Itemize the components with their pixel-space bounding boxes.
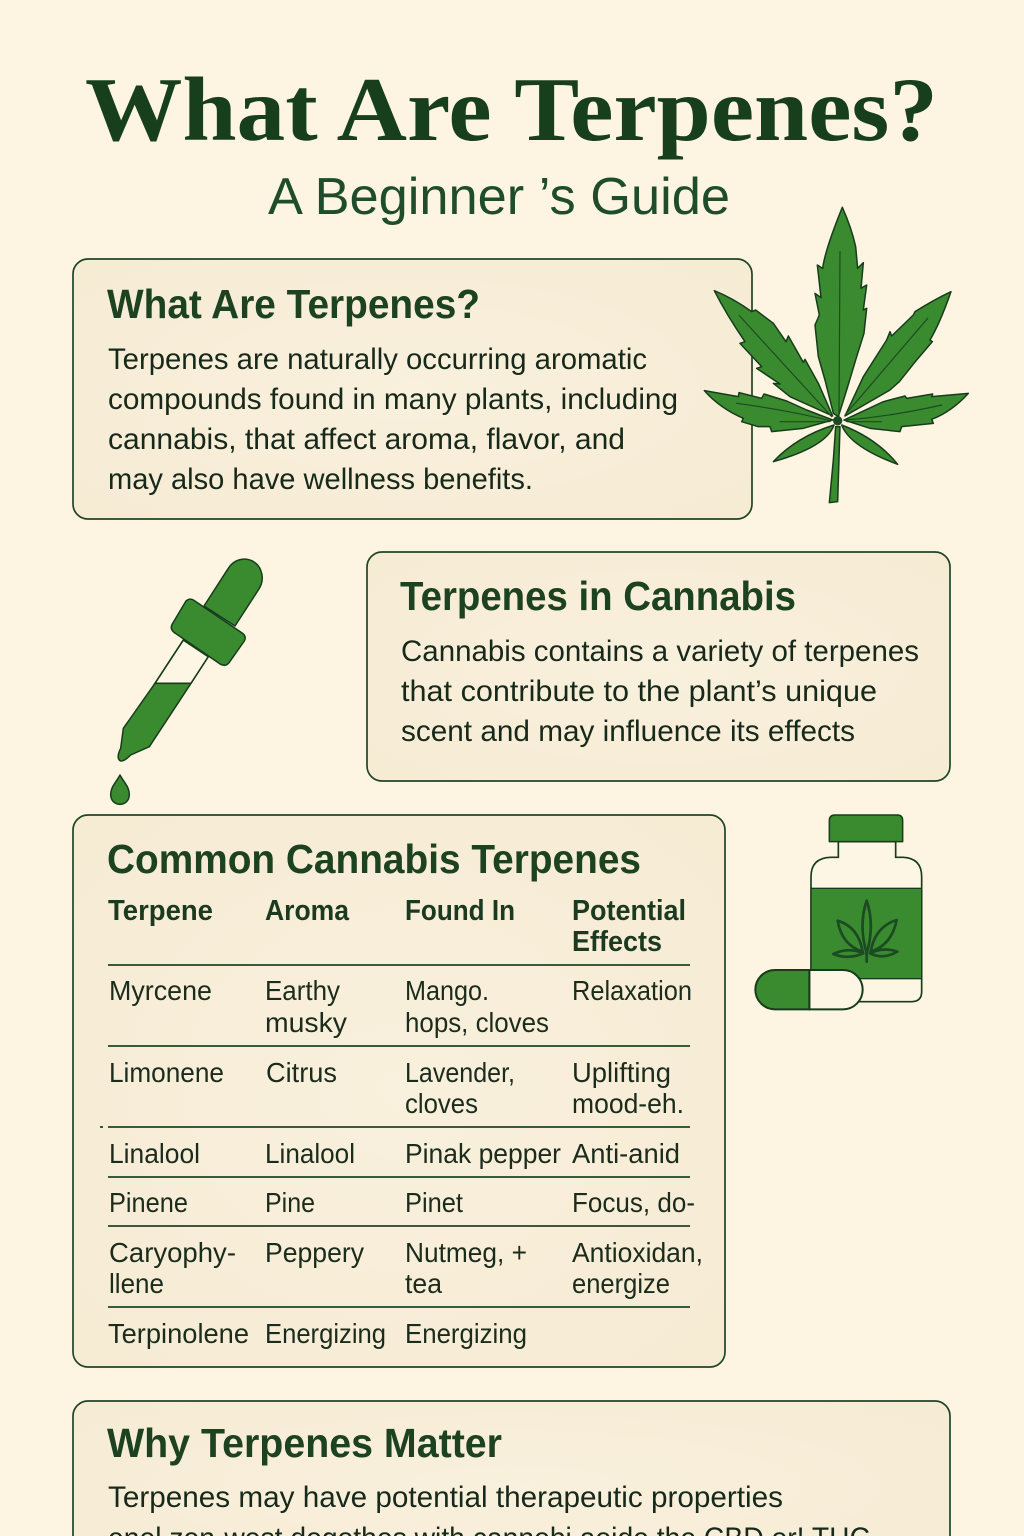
row: myrcene: Relaxation <box>572 975 692 1006</box>
row: linalool: Linalool <box>265 1138 355 1169</box>
title: What Are Terpenes? <box>85 59 938 160</box>
text block: definition: Terpenes are naturally occurring aromatic <box>108 343 647 376</box>
row: myrcene: Earthy <box>265 975 340 1006</box>
panel: terpenes in cannabis <box>367 552 950 781</box>
text block: why terpenes matter description <box>108 1481 870 1536</box>
row: limonene: cloves <box>405 1088 478 1119</box>
row: pinene <box>109 1187 695 1218</box>
table header: Potential <box>572 895 686 927</box>
subtitle: A Beginner ’s Guide <box>268 168 730 226</box>
text block: cannabis description: scent and may influence its effects <box>401 715 855 748</box>
row: caryophyllene: energize <box>572 1268 670 1299</box>
icon: dropper <box>111 559 262 804</box>
row: caryophyllene: Antioxidan, <box>572 1237 703 1268</box>
row: myrcene: musky <box>265 1007 347 1038</box>
panel: what are terpenes <box>73 259 752 519</box>
heading: what are terpenes: What Are Terpenes? <box>107 281 480 327</box>
row: terpinolene <box>108 1318 527 1349</box>
text block: cannabis description: that contribute to the plant’s unique <box>401 675 877 708</box>
row: limonene <box>109 1057 684 1119</box>
row: terpinolene: Energizing <box>405 1318 527 1349</box>
icon: cannabis leaf <box>704 207 968 503</box>
panel: common cannabis terpenes <box>73 815 725 1367</box>
text block: why terpenes matter description: Terpenes may have potential therapeutic properties <box>108 1481 783 1514</box>
row: myrcene: Myrcene <box>109 975 212 1006</box>
heading: common cannabis terpenes: Common Cannabis Terpenes <box>107 836 641 882</box>
heading: terpenes in cannabis: Terpenes in Cannabis <box>400 573 796 619</box>
row: limonene: Lavender, <box>405 1057 515 1088</box>
table: terpene comparison <box>100 895 703 1349</box>
text block: definition: compounds found in many plants, including <box>108 383 678 416</box>
text block: definition <box>108 343 678 496</box>
row: linalool: Anti-anid <box>572 1138 680 1169</box>
text block: definition: cannabis, that affect aroma, flavor, and <box>108 423 625 456</box>
icon: droplet <box>111 775 129 804</box>
table header: Terpene <box>108 895 213 927</box>
table header <box>108 895 686 958</box>
row: caryophyllene: tea <box>405 1268 443 1299</box>
table header: Found In <box>405 895 515 927</box>
row: pinene: Pinene <box>109 1187 188 1218</box>
row: limonene: Limonene <box>109 1057 224 1088</box>
row: linalool: Pinak pepper <box>405 1138 561 1169</box>
row: myrcene: Mango. <box>405 975 489 1006</box>
text block: cannabis description <box>401 635 919 748</box>
row: caryophyllene: Peppery <box>265 1237 364 1268</box>
text block: definition: may also have wellness benefits. <box>108 463 533 496</box>
row: caryophyllene: Caryophy- <box>109 1237 236 1268</box>
icon: capsule <box>755 970 863 1009</box>
text block: cannabis description: Cannabis contains a variety of terpenes <box>401 635 919 668</box>
panel: why terpenes matter <box>73 1401 950 1536</box>
heading: why terpenes matter: Why Terpenes Matter <box>107 1420 502 1466</box>
row: limonene: mood-eh. <box>572 1088 684 1119</box>
icon: small leaf on label <box>833 901 897 962</box>
row: caryophyllene: llene <box>109 1268 164 1299</box>
row: limonene: Citrus <box>266 1057 337 1088</box>
table header: Effects <box>572 926 662 958</box>
row: myrcene <box>109 975 692 1038</box>
row: myrcene: hops, cloves <box>405 1007 549 1038</box>
icon: bottle and capsule <box>755 815 922 1009</box>
row: caryophyllene: Nutmeg, + <box>405 1237 527 1268</box>
row: caryophyllene <box>109 1237 703 1299</box>
row: terpinolene: Energizing <box>265 1318 386 1349</box>
row: linalool: Linalool <box>109 1138 200 1169</box>
row: limonene: Uplifting <box>572 1057 671 1088</box>
row: pinene: Focus, do- <box>572 1187 695 1218</box>
row: linalool <box>109 1138 680 1169</box>
table header: Aroma <box>265 895 350 927</box>
row: terpinolene: Terpinolene <box>108 1318 249 1349</box>
row: pinene: Pine <box>265 1187 315 1218</box>
row: pinene: Pinet <box>405 1187 463 1218</box>
